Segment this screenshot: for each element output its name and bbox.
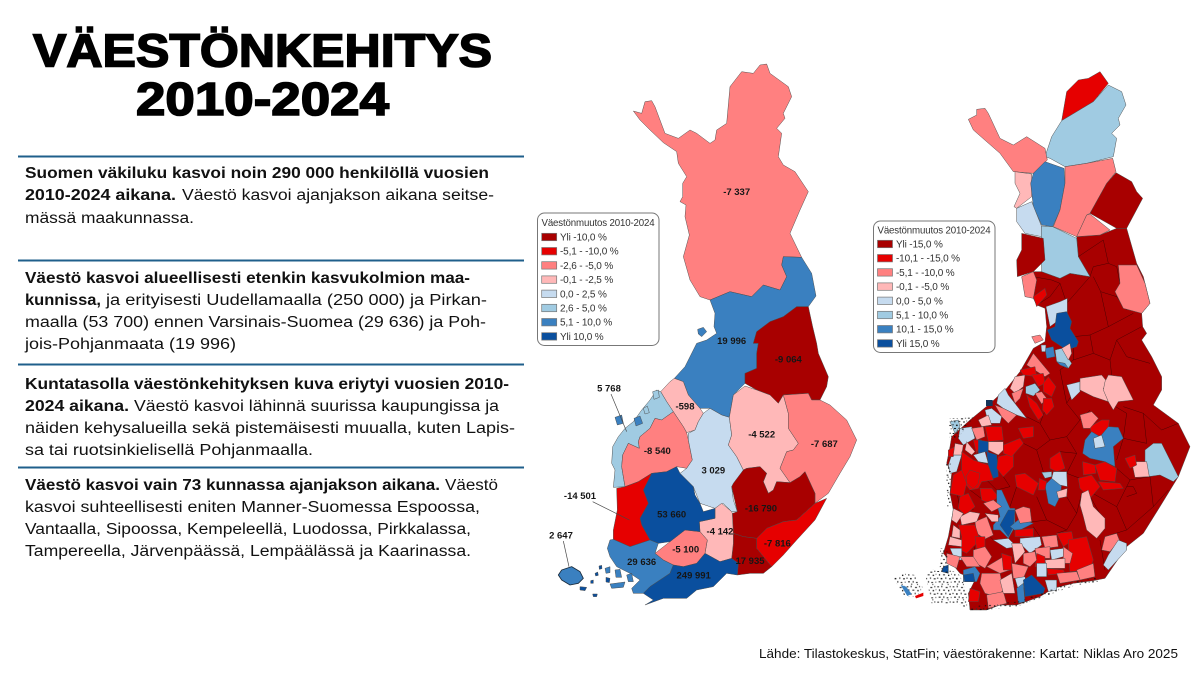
region value labels: 19 996 — [717, 336, 746, 347]
source note: Lähde: Tilastokeskus, StatFin; väestörakenne: Kartat: Niklas Aro 2025 — [759, 647, 1178, 661]
text block: population growth: Väestö kasvoi ajanjakson aikana seitse- — [182, 187, 494, 204]
region: Kymenlaakso — [732, 533, 772, 575]
region value labels: -5 100 — [672, 545, 699, 556]
title — [33, 24, 492, 125]
region: Lapland — [633, 64, 808, 300]
legend: municipal map: -0,1 - -5,0 % — [896, 282, 949, 293]
text block: growth triangle: Väestö kasvoi alueellisesti etenkin kasvukolmion maa- — [25, 270, 470, 287]
legend: municipal map: Yli -15,0 % — [896, 240, 943, 250]
legend: regional map: Yli -10,0 % — [560, 232, 607, 244]
region: Åland — [558, 390, 659, 597]
map: regional population change — [549, 64, 857, 605]
region value labels: 2 647 — [549, 530, 573, 541]
region: South Karelia — [757, 498, 827, 567]
text block: growth triangle: jois-Pohjanmaata (19 996) — [24, 336, 236, 353]
text block: 73 municipalities: kasvoi suhteellisesti eniten Manner-Suomessa Espoossa, — [25, 499, 480, 516]
text block: 73 municipalities — [25, 477, 498, 560]
Pirkanmaa municipalities — [993, 490, 1015, 538]
archipelago — [893, 400, 1098, 612]
legend: municipal map: 10,1 - 15,0 % — [896, 325, 954, 336]
region: Ostrobothnia — [612, 390, 673, 487]
text block: 73 municipalities: Väestö — [445, 477, 498, 494]
region: Satakunta — [613, 473, 652, 547]
legend: regional map: -2,6 - -5,0 % — [560, 261, 613, 272]
region value labels: -4 142 — [707, 526, 733, 537]
region value labels: -7 816 — [764, 539, 791, 550]
legend: regional map: -5,1 - -10,0 % — [560, 247, 619, 258]
municipality boundaries — [957, 240, 1178, 570]
text block: growth triangle: ja erityisesti Uudellamaalla (250 000) ja Pirkan- — [105, 292, 487, 309]
text block: municipalities: 2024 aikana. — [25, 398, 129, 415]
region value labels: -598 — [676, 401, 694, 412]
region: Uusimaa — [643, 553, 738, 605]
region value labels: 17 935 — [735, 556, 765, 567]
Southwest municipalities — [958, 525, 980, 553]
text block: municipalities: Kuntatasolla väestönkehityksen kuva eriytyi vuosien 2010- — [25, 376, 509, 393]
region: South Savo — [732, 467, 815, 538]
legend: municipal map: -5,1 - -10,0 % — [896, 268, 955, 279]
region value labels — [549, 187, 838, 581]
text block: municipalities: näiden kehysalueilla sekä pistemäisesti muualla, kuten Lapis- — [25, 420, 515, 437]
leader lines — [563, 394, 629, 567]
text block: population growth — [25, 165, 494, 227]
region: Kanta-Häme — [655, 530, 707, 567]
legend: regional map: 0,0 - 2,5 % — [560, 289, 607, 300]
region: Pirkanmaa — [640, 467, 715, 543]
text block: 73 municipalities: Tampereella, Järvenpäässä, Lempäälässä ja Kaarinassa. — [25, 543, 471, 560]
region value labels: -4 522 — [748, 429, 775, 440]
text block: 73 municipalities: Vantaalla, Sipoossa, Kempeleellä, Luodossa, Pirkkalassa, — [25, 521, 471, 538]
region: Central Finland — [680, 408, 743, 512]
region value labels: -7 337 — [723, 187, 750, 198]
region value labels: 249 991 — [677, 570, 712, 581]
region value labels: -16 790 — [745, 504, 777, 515]
region value labels: -9 064 — [775, 355, 802, 366]
text block: growth triangle: maalla (53 700) ennen Varsinais-Suomea (29 636) ja Poh- — [25, 314, 486, 331]
Ostrobothnia coast municipalities — [1027, 353, 1050, 377]
region value labels: 5 768 — [597, 384, 621, 395]
region value labels: 53 660 — [657, 509, 686, 520]
region value labels: 29 636 — [627, 557, 656, 568]
region value labels: 3 029 — [701, 465, 725, 476]
base: declining municipalities — [943, 228, 1190, 610]
region: Kainuu — [745, 307, 828, 403]
title: 2010-2024 — [136, 73, 389, 125]
legend: municipal map: 0,0 - 5,0 % — [896, 296, 943, 307]
region value labels: -8 540 — [644, 446, 671, 457]
region value labels: -14 501 — [564, 491, 597, 502]
legend: regional map: -0,1 - -2,5 % — [560, 275, 613, 286]
region: North Savo — [728, 386, 798, 493]
Uusimaa municipalities — [1023, 575, 1045, 597]
region: North Karelia — [780, 393, 857, 503]
lake island Hailuoto — [698, 327, 707, 337]
text block: growth triangle: kunnissa, — [25, 292, 101, 309]
Northern Ostrobothnia municipalities — [1022, 272, 1037, 298]
text block: municipalities — [25, 376, 515, 459]
legend: regional map: 5,1 - 10,0 % — [560, 318, 612, 329]
legend: municipal map: 5,1 - 10,0 % — [896, 310, 948, 322]
legend: municipal map: -10,1 - -15,0 % — [896, 254, 960, 265]
text block: 73 municipalities: Väestö kasvoi vain 73 kunnassa ajanjakson aikana. — [25, 477, 440, 494]
text block: municipalities: sa tai ruotsinkielisellä Pohjanmaalla. — [25, 442, 313, 459]
legend: regional map: 2,6 - 5,0 % — [560, 304, 607, 314]
legend: regional map: Yli 10,0 % — [560, 332, 604, 343]
text block: growth triangle — [24, 270, 487, 353]
region: Päijät-Häme — [699, 503, 733, 562]
region: Central Ostrobothnia — [661, 378, 703, 433]
text block: municipalities: Väestö kasvoi lähinnä suurissa kaupungissa ja — [134, 398, 499, 415]
legend: municipal map: Väestönmuutos 2010-2024 — [878, 226, 991, 236]
legend: regional map — [538, 213, 659, 346]
region: South Ostrobothnia — [622, 412, 692, 487]
Lapland municipalities — [1062, 72, 1108, 121]
map: municipal population change — [893, 72, 1190, 612]
text block: population growth: 2010-2024 aikana. — [25, 187, 176, 204]
text block: population growth: mässä maakunnassa. — [25, 210, 194, 227]
region value labels: -7 687 — [811, 439, 838, 450]
Central Finland and Savo municipalities — [1050, 452, 1065, 472]
region: Northern Ostrobothnia — [674, 257, 816, 417]
legend: municipal map — [874, 221, 995, 352]
region: Southwest Finland — [607, 539, 673, 593]
title: VÄESTÖNKEHITYS — [33, 24, 492, 76]
text block: population growth: Suomen väkiluku kasvoi noin 290 000 henkilöllä vuosien — [25, 165, 489, 182]
legend: municipal map: Yli 15,0 % — [896, 339, 940, 350]
legend: regional map: Väestönmuutos 2010-2024 — [542, 218, 655, 229]
